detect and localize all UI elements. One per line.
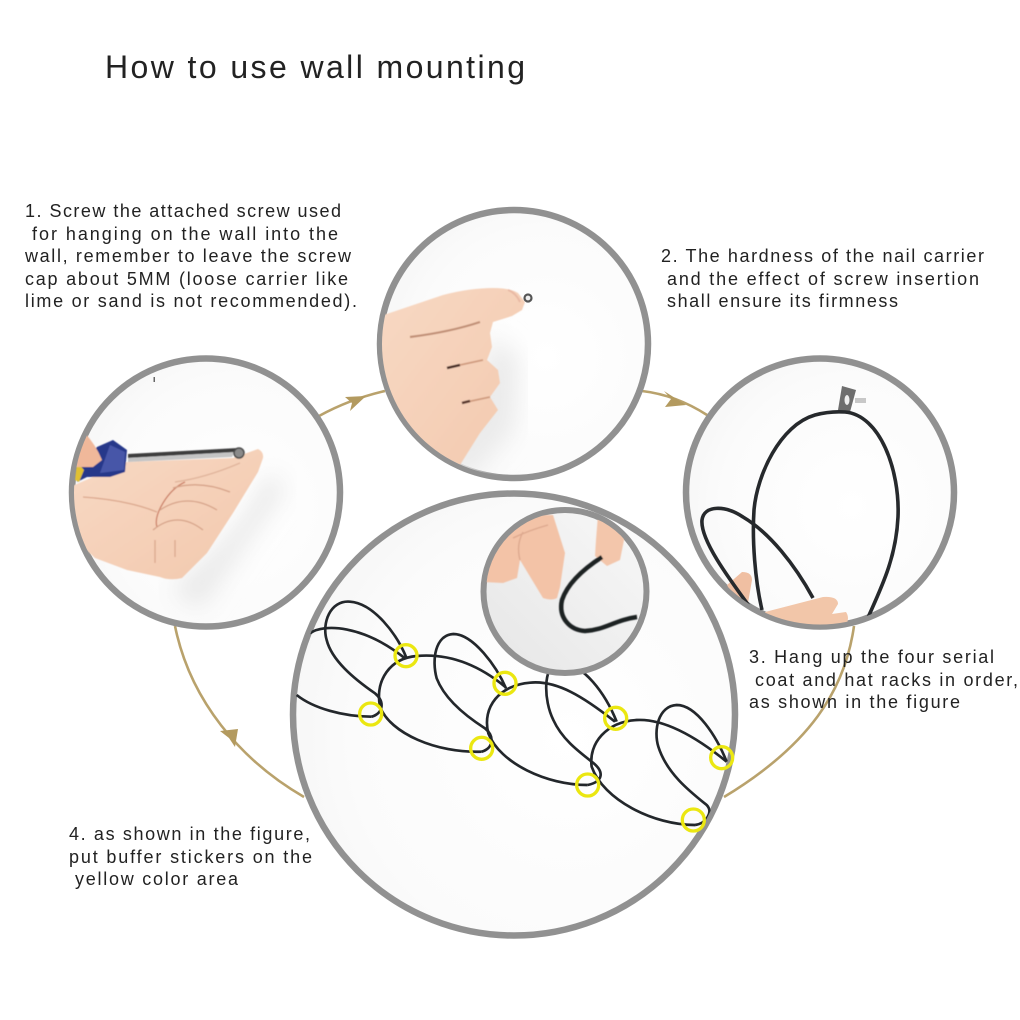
panel: step 4 photo <box>293 494 735 936</box>
icon: hand pinching screw <box>382 288 526 464</box>
step 3 text: 3. Hang up the four serial <box>749 647 994 667</box>
arrow: step 3 to step 4 <box>724 626 854 797</box>
icon: yellow markers <box>360 645 733 831</box>
step 4 text: 4. as shown in the figure, <box>69 824 310 844</box>
step 3 text <box>749 647 1018 712</box>
step 2 text <box>661 246 984 311</box>
arrow: step 4 to step 1 <box>175 626 304 797</box>
icon: hand and wire rack <box>702 412 898 632</box>
step 1 text: cap about 5MM (loose carrier like <box>25 269 348 289</box>
step 4 text: yellow color area <box>75 869 239 889</box>
panel: step 2 photo <box>375 210 648 485</box>
step 2 text: shall ensure its firmness <box>667 291 898 311</box>
icon: four serial wire racks <box>297 602 727 825</box>
icon: fingers attaching sticker <box>484 515 637 631</box>
step 4 text <box>69 824 312 889</box>
icon: wall specks <box>154 377 155 382</box>
step 1 text: lime or sand is not recommended). <box>25 291 357 311</box>
arrow: step 2 to step 3 <box>642 391 707 415</box>
step 1 text: 1. Screw the attached screw used <box>25 201 341 221</box>
icon: wall hook bracket <box>838 386 866 412</box>
panel: step 3 photo <box>686 358 954 632</box>
step 4 text: put buffer stickers on the <box>69 847 312 867</box>
step 1 text: for hanging on the wall into the <box>32 224 338 244</box>
step 1 text: wall, remember to leave the screw <box>24 246 352 266</box>
step 2 text: and the effect of screw insertion <box>667 269 979 289</box>
panel: step 1 photo <box>70 358 340 626</box>
panel: inset photo <box>484 510 646 673</box>
step 1 text <box>24 201 357 311</box>
step 3 text: as shown in the figure <box>749 692 960 712</box>
icon: screw <box>524 294 532 302</box>
arrow: step 1 to step 2 <box>319 391 385 416</box>
title: How to use wall mounting <box>105 49 525 85</box>
step 2 text: 2. The hardness of the nail carrier <box>661 246 984 266</box>
icon: hand with screwdriver <box>70 432 263 579</box>
step 3 text: coat and hat racks in order, <box>755 670 1018 690</box>
